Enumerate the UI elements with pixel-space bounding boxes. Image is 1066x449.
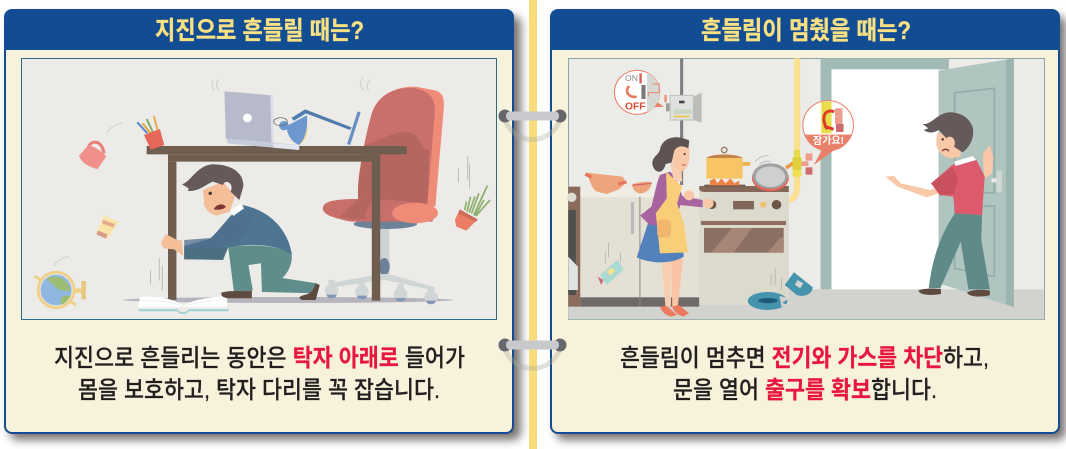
panel header	[550, 10, 1060, 50]
falling cup	[96, 216, 119, 239]
desk lamp	[274, 109, 361, 145]
shoes	[221, 291, 252, 298]
frying pan	[752, 156, 800, 191]
text: right caption: 문을 열어 출구를 확보합니다.	[673, 377, 937, 404]
trousers	[929, 213, 990, 289]
person crouching	[161, 164, 320, 300]
hands	[703, 198, 714, 208]
table	[147, 146, 407, 301]
illustration: kitchen	[567, 58, 1044, 320]
plant pot	[455, 186, 490, 231]
raised arm	[983, 145, 993, 178]
ring binder: top	[498, 110, 566, 140]
woman	[637, 137, 714, 317]
falling can	[598, 243, 624, 285]
heading: right: 흔들림이 멈췄을 때는?	[701, 17, 911, 45]
shirt	[931, 159, 985, 215]
floor	[568, 289, 1044, 319]
laptop	[224, 91, 299, 150]
callout label: close: 잠가요!	[813, 134, 844, 147]
panel header	[4, 10, 514, 50]
door frame and opening	[821, 58, 949, 289]
ring binder: bottom	[498, 338, 566, 368]
text: left caption: 몸을 보호하고, 탁자 다리를 꼭 잡습니다.	[78, 377, 440, 404]
hand	[161, 234, 183, 256]
panel: when shaking	[4, 10, 521, 440]
breaker box	[664, 93, 702, 123]
text: left caption: 지진으로 흔들리는 동안은 탁자 아래로 들어가	[54, 345, 465, 372]
panel: when shaking stops	[550, 10, 1066, 440]
head	[936, 133, 961, 158]
apron	[656, 172, 688, 253]
callout: ON OFF switch: OFF	[625, 101, 646, 112]
floor shadow	[123, 297, 453, 303]
skirt	[637, 223, 684, 262]
colander and bowl	[585, 173, 652, 194]
pot and burner	[704, 147, 750, 187]
gas valve	[793, 150, 812, 177]
centre stripe	[529, 0, 537, 449]
legs	[662, 258, 672, 307]
heading: left: 지진으로 흔들릴 때는?	[155, 17, 364, 45]
callout: ON OFF switch: ON	[625, 73, 638, 83]
text: left caption	[54, 345, 465, 404]
shoes	[918, 289, 941, 295]
neck and head	[670, 163, 682, 182]
broken plate	[748, 268, 813, 310]
arm and blouse	[640, 172, 703, 227]
gas pipe	[789, 58, 797, 200]
electric conduit	[680, 58, 683, 185]
illustration: under the table	[22, 58, 496, 320]
globe	[34, 257, 86, 308]
cabinet	[567, 187, 699, 307]
stove	[699, 186, 789, 305]
neck and head	[230, 204, 244, 216]
pencil cup	[137, 116, 164, 150]
shake lines	[150, 156, 469, 291]
callout: close valve	[803, 101, 853, 165]
man	[886, 112, 993, 297]
text: right caption	[620, 345, 989, 404]
trousers	[228, 245, 316, 293]
falling mug	[79, 123, 122, 169]
text: right caption: 흔들림이 멈추면 전기와 가스를 차단하고,	[620, 345, 989, 372]
hair	[182, 164, 243, 200]
open door	[939, 58, 1014, 307]
office chair	[323, 87, 444, 304]
callout: ON OFF switch	[614, 70, 664, 114]
open book	[139, 296, 228, 314]
sweater	[184, 205, 292, 259]
extended arm	[886, 176, 939, 197]
